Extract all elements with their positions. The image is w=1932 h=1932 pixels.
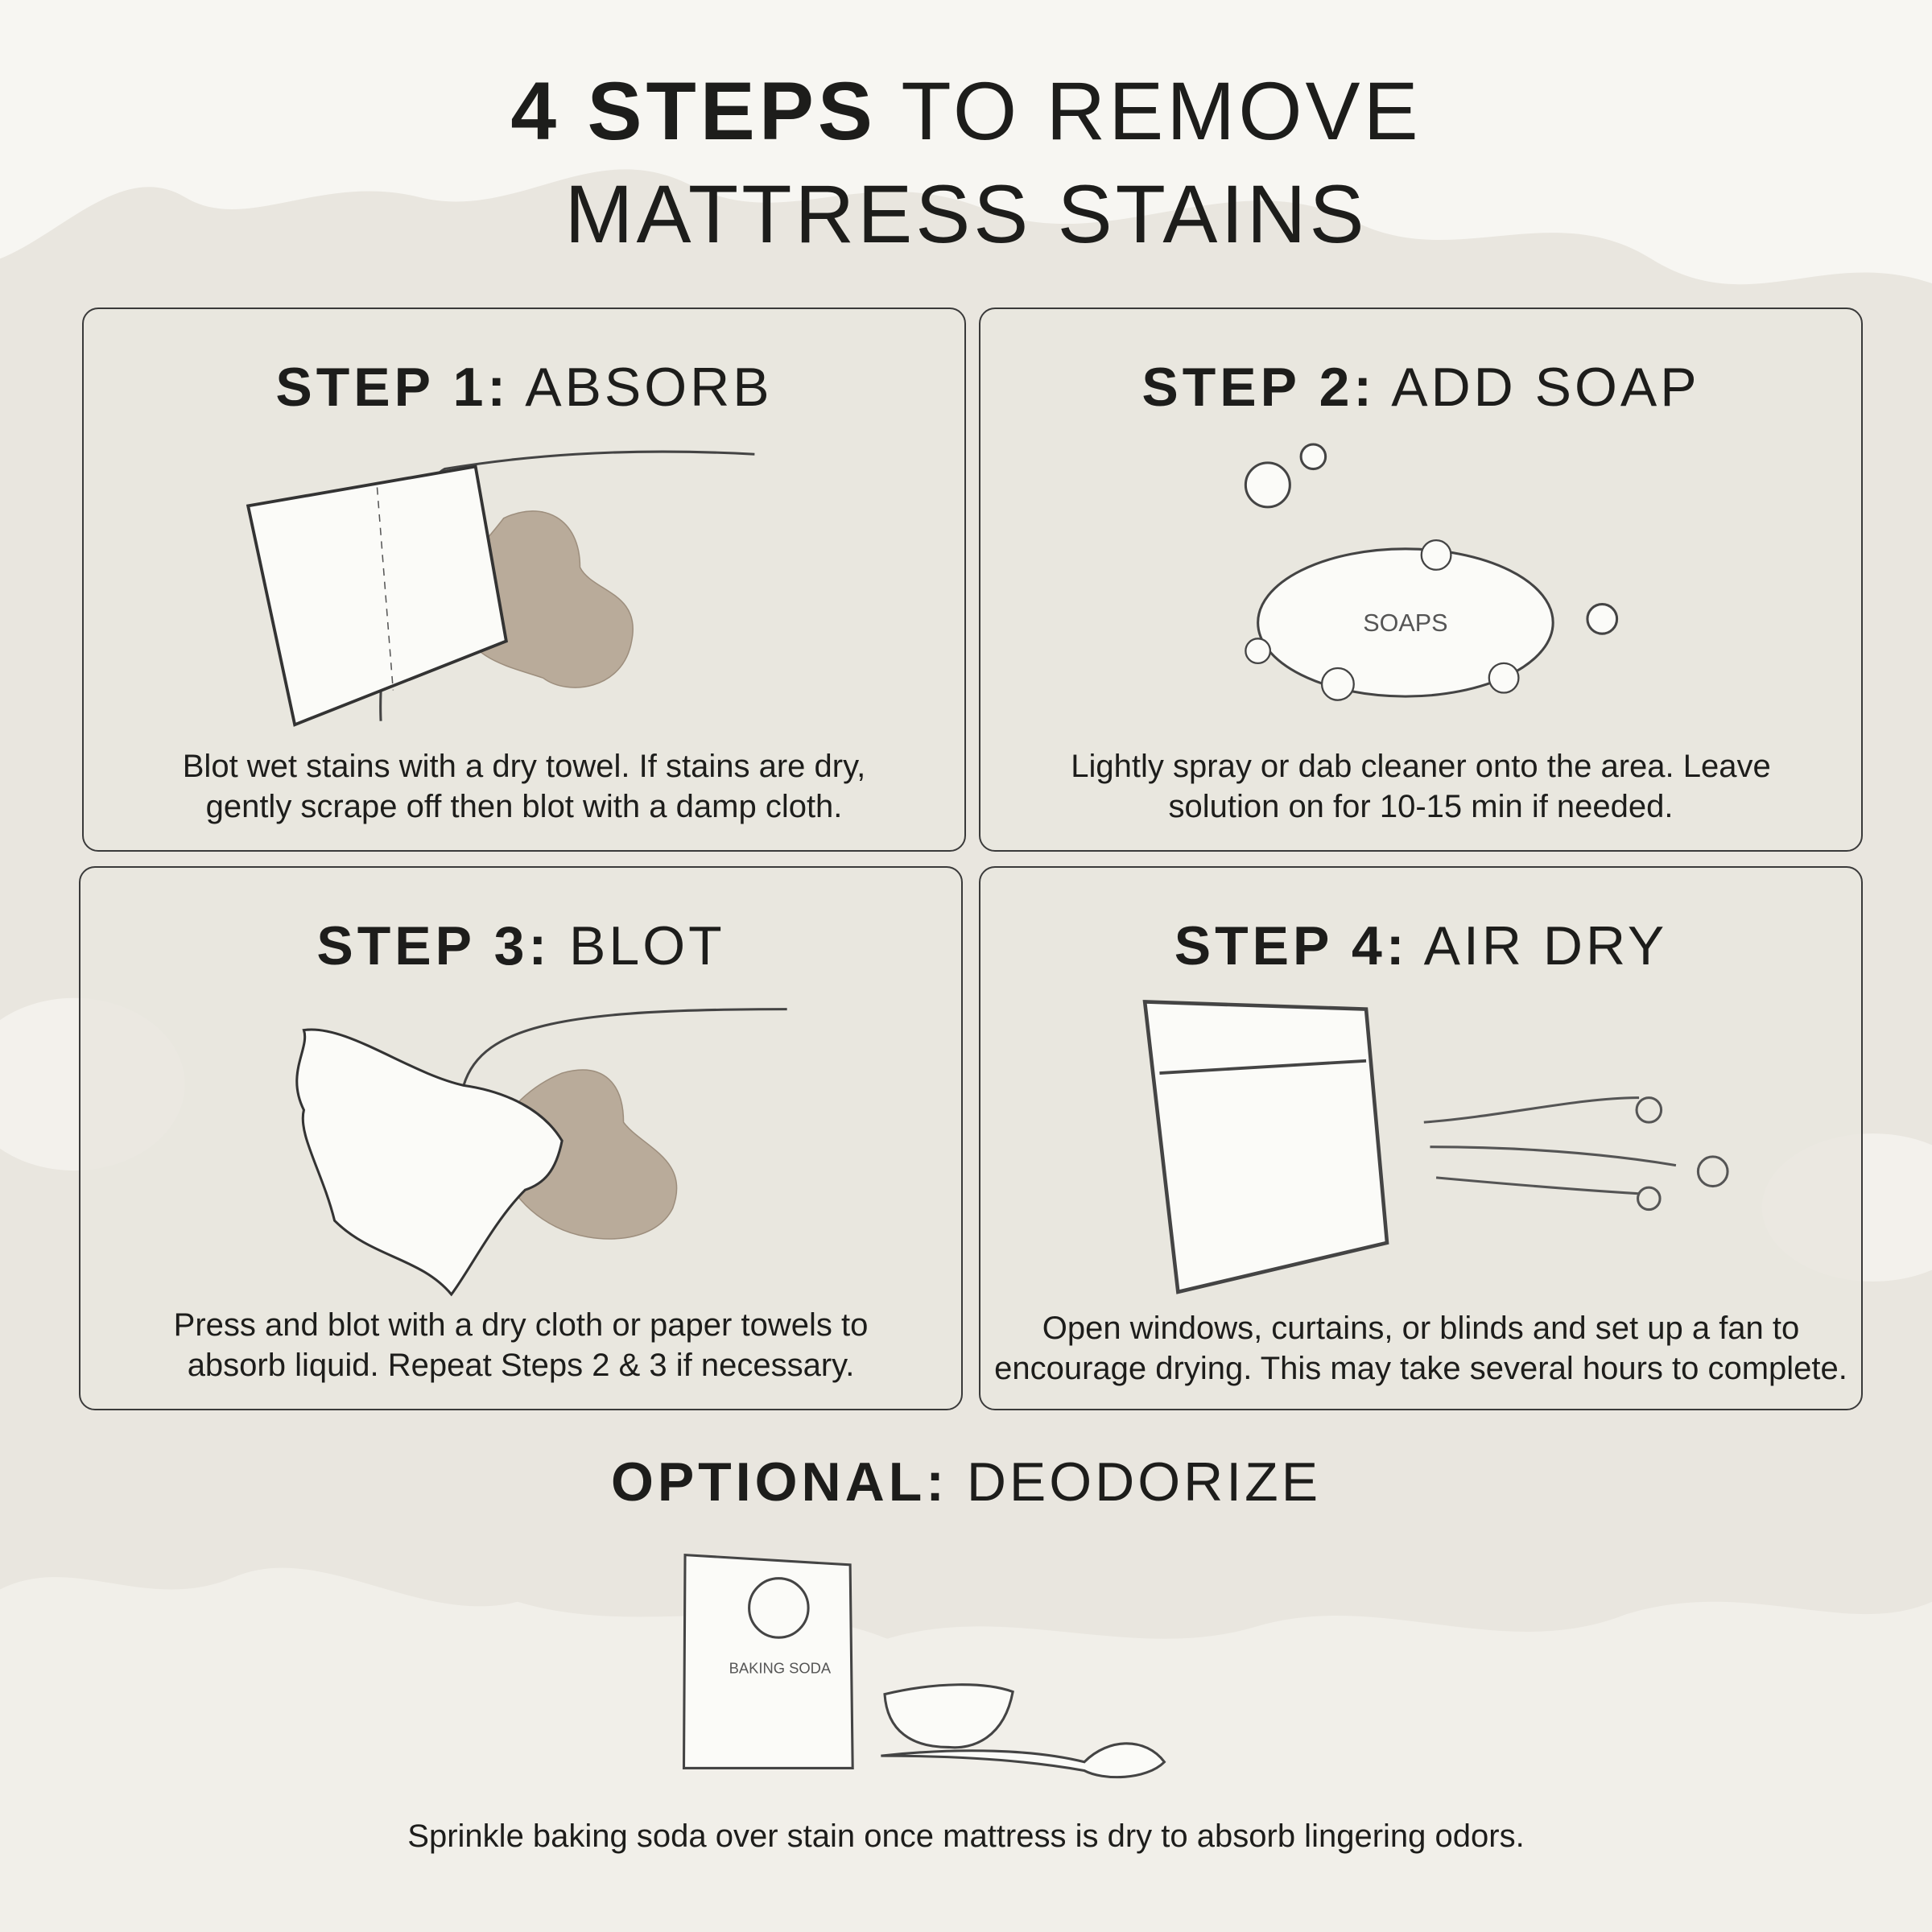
illustration: towel on stain	[246, 451, 755, 727]
text: step 1: gently scrape off then blot with a damp cloth.	[206, 789, 842, 824]
title	[510, 65, 1422, 260]
panel: step 3	[79, 866, 963, 1410]
text: step 1: Blot wet stains with a dry towel. If stains are dry,	[183, 749, 865, 784]
text: step 2	[1071, 749, 1771, 824]
text: step 4: Open windows, curtains, or blinds and set up a fan to	[1042, 1311, 1799, 1346]
heading: step 2: STEP 2: ADD SOAP	[1141, 357, 1700, 418]
heading: step 3: STEP 3: BLOT	[316, 915, 725, 976]
text: step 2: solution on for 10-15 min if needed.	[1168, 789, 1674, 824]
title: MATTRESS STAINS	[565, 168, 1367, 260]
illustration: soap bar: SOAPS	[1363, 609, 1448, 637]
text: step 3: Press and blot with a dry cloth or paper towels to	[174, 1307, 868, 1343]
text: step 3	[174, 1307, 868, 1383]
text: step 1	[183, 749, 865, 824]
panel: step 2	[979, 308, 1863, 852]
panel: step 4	[979, 866, 1863, 1410]
text: step 3: absorb liquid. Repeat Steps 2 & 3 if necessary.	[188, 1348, 854, 1383]
heading: step 1: STEP 1: ABSORB	[275, 357, 773, 418]
text: step 4	[994, 1311, 1847, 1386]
illustration: cloth blotting	[295, 1008, 787, 1296]
heading: optional: OPTIONAL: DEODORIZE	[611, 1451, 1321, 1513]
illustration: window and wind	[1143, 1000, 1729, 1294]
text: optional: Sprinkle baking soda over stain once mattress is dry to absorb lingering odors.	[407, 1818, 1525, 1854]
illustration: soap bar	[1245, 443, 1618, 701]
illustration: baking soda: BAKING SODA	[729, 1660, 832, 1677]
panel: step 1	[82, 308, 966, 852]
text: step 2: Lightly spray or dab cleaner onto the area. Leave	[1071, 749, 1771, 784]
text: step 4: encourage drying. This may take several hours to complete.	[994, 1351, 1847, 1386]
title: 4 STEPS TO REMOVE	[510, 65, 1422, 157]
heading: step 4: STEP 4: AIR DRY	[1174, 915, 1667, 976]
